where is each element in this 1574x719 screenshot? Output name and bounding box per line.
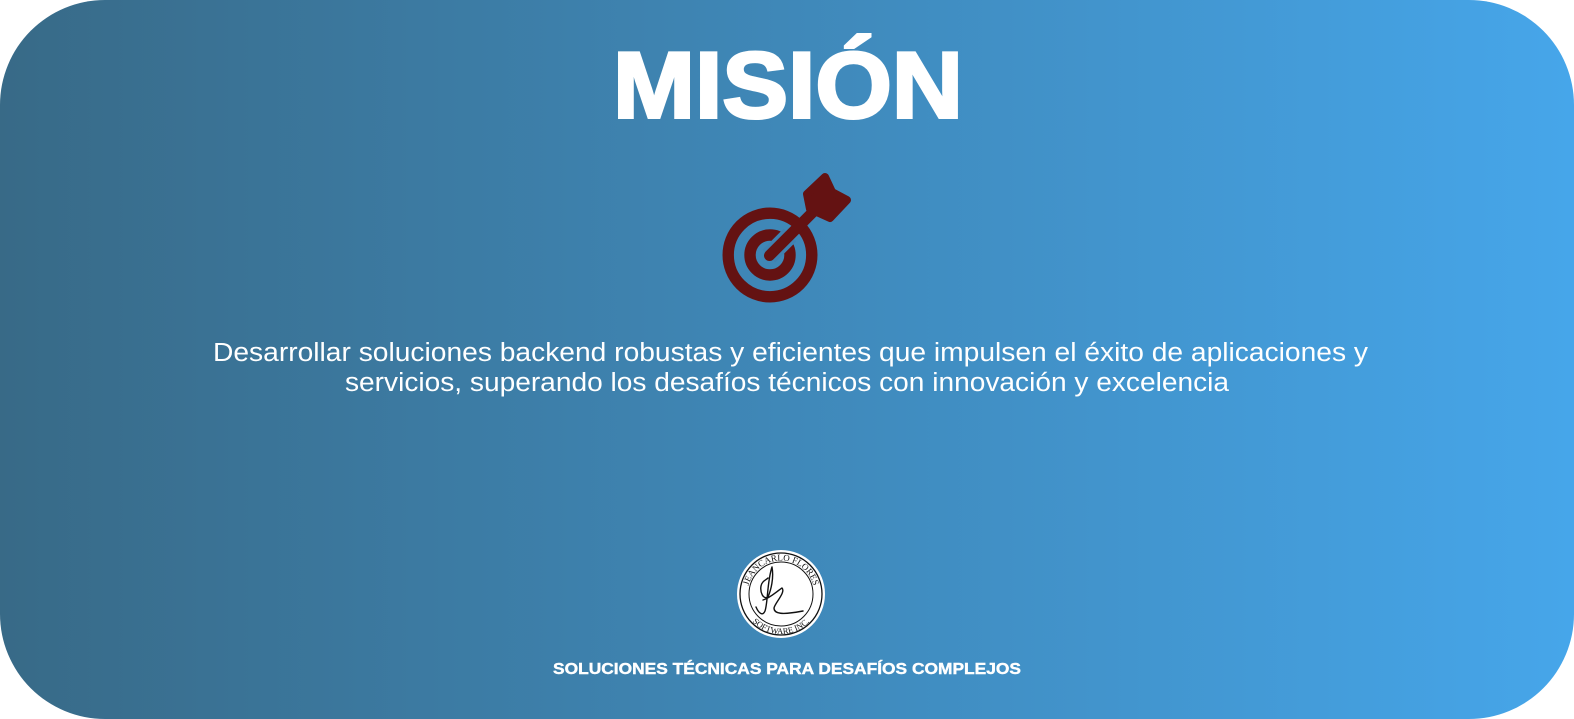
- logo arc text: top: JEANCARLO FLORES: [743, 554, 819, 586]
- logo: round signature seal: [737, 550, 825, 638]
- footer tagline: SOLUCIONES TÉCNICAS PARA DESAFÍOS COMPLEJOS: [553, 659, 1021, 678]
- mission text line 1: Desarrollar soluciones backend robustas y eficientes que impulsen el éxito de aplicaciones y: [213, 339, 1368, 367]
- mission text line 2: servicios, superando los desafíos técnicos con innovación y excelencia: [345, 369, 1230, 397]
- logo signature: [756, 567, 803, 614]
- logo arc text: bottom: SOFTWARE INC.: [752, 618, 810, 634]
- title: MISIÓN: [613, 32, 963, 138]
- mission statement text: [213, 339, 1368, 397]
- icon: target with arrow: [728, 177, 847, 297]
